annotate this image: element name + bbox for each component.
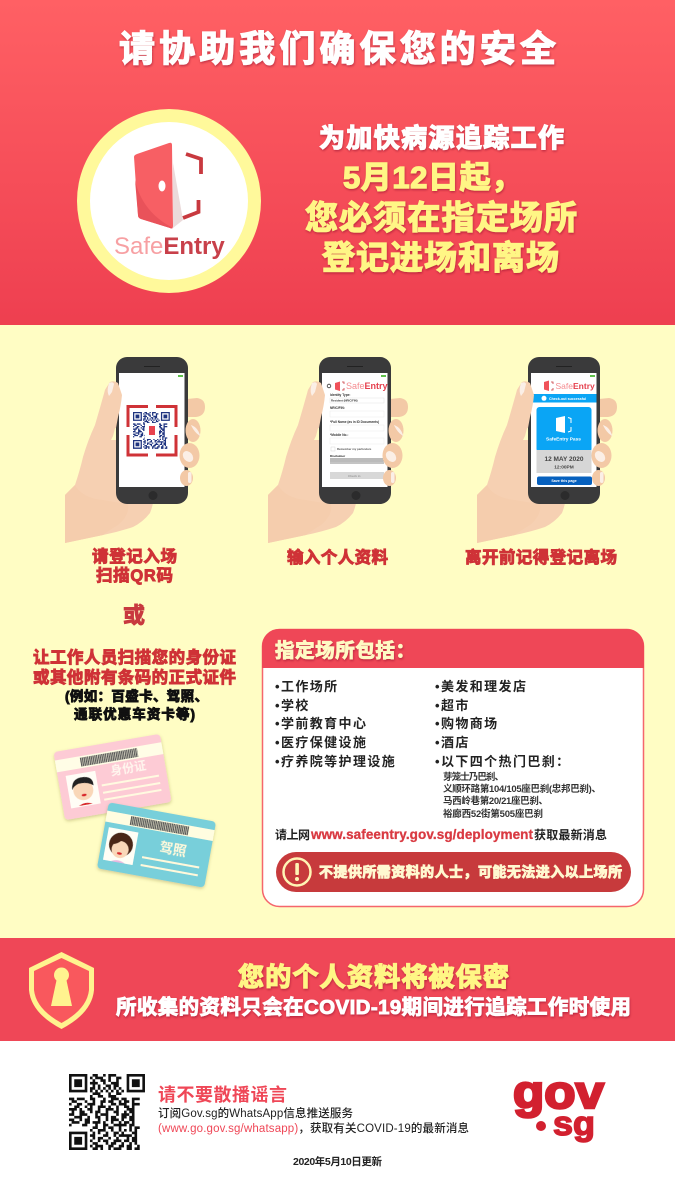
QR scan frame [128, 406, 176, 455]
panel: designated venues [262, 629, 644, 906]
step 2 label: 输入个人资料 [287, 544, 388, 568]
footer text: 请不要散播谣言 [158, 1081, 287, 1107]
form screen [327, 381, 388, 479]
list: left column: •学前教育中心 [275, 716, 367, 731]
step 2: hand with phone form [268, 357, 408, 543]
logo wordmark: SafeEntry [114, 233, 225, 260]
pass screen: SafeEntry [556, 381, 595, 391]
list: left column: •医疗保健设施 [275, 735, 367, 750]
form screen: Check in [348, 474, 361, 478]
logo: gov.sg: sg [553, 1105, 595, 1143]
hawker centre names: 裕廊西52街第505座巴刹 [443, 808, 543, 820]
badge: SafeEntry logo [77, 109, 261, 293]
form screen: Resident (NRIC/FIN) [331, 398, 358, 402]
website line: 获取最新消息 [534, 826, 607, 843]
staff scan text block: (例如：百盛卡、驾照、 [65, 688, 208, 704]
portrait [106, 831, 135, 865]
headline text: 您必须在指定场所 [305, 191, 577, 239]
step 1 label: 扫描QR码 [96, 566, 173, 585]
icon: door [134, 143, 201, 228]
title: 请协助我们确保您的安全 [119, 20, 556, 72]
icon: pink ID card [53, 734, 172, 820]
pass screen: 12:00PM [554, 464, 574, 470]
icon: exclamation [284, 858, 310, 886]
hawker centre names: 义顺环路第104/105座巴刹(忠邦巴刹)、 [443, 783, 601, 795]
form screen: *Mobile No.: [330, 433, 348, 437]
staff scan text block [33, 644, 236, 722]
panel: top red header [0, 0, 675, 325]
panel header [262, 629, 644, 668]
panel heading: 指定场所包括： [275, 634, 415, 663]
QR code [69, 1074, 145, 1150]
list: right column: •酒店 [435, 735, 470, 750]
step 3: hand with SafeEntry pass [477, 357, 617, 543]
update date: 2020年5月10日更新 [293, 1155, 382, 1168]
privacy heading: 您的个人资料将被保密 [238, 957, 509, 994]
staff scan text block: 或其他附有条码的正式证件 [33, 664, 236, 688]
list: left column: •工作场所 [275, 679, 339, 694]
step 3 label: 离开前记得登记离场 [465, 544, 617, 568]
list: right column: •美发和理发店 [435, 679, 527, 694]
staff scan text block: 让工作人员扫描您的身份证 [33, 644, 236, 668]
website line: www.safeentry.gov.sg/deployment [310, 827, 534, 842]
logo: gov.sg: gov [513, 1066, 604, 1118]
step 1 label [92, 543, 177, 585]
privacy note: 所收集的资料只会在COVID-19期间进行追踪工作时使用 [116, 995, 631, 1019]
logo: gov.sg [513, 1066, 604, 1143]
list: right column: •购物商场 [435, 716, 499, 731]
icon: blue driving licence [97, 802, 216, 888]
list: right column [435, 679, 601, 820]
list: right column: •以下四个热门巴刹： [435, 754, 571, 769]
headline text: 登记进场和离场 [322, 231, 559, 279]
pass screen [533, 380, 596, 485]
footer text: 订阅Gov.sg的WhatsApp信息推送服务 [158, 1106, 354, 1120]
list: left column: •疗养院等护理设施 [275, 754, 396, 769]
list: left column: •学校 [275, 698, 310, 713]
form screen: Remember my particulars [337, 447, 372, 451]
headline text [305, 118, 577, 279]
form screen: *Full Name (as in ID Documents) [330, 420, 379, 424]
headline text: 5月12日起， [343, 160, 522, 195]
or: 或 [123, 598, 145, 630]
list: left column [275, 679, 396, 769]
panel: yellow steps section [0, 325, 675, 938]
pass screen: Save this page [551, 479, 577, 483]
website line [275, 826, 607, 843]
icon: blue driving licence: 驾照 [158, 836, 189, 860]
form screen: NRIC/FIN: [330, 406, 345, 410]
warning pill [276, 852, 631, 892]
portrait [70, 775, 97, 807]
hawker centre names: 芽笼士乃巴刹、 [443, 771, 504, 783]
footer text: (www.go.gov.sg/whatsapp)，获取有关COVID-19的最新消息 [158, 1121, 469, 1135]
step 1 label: 请登记入场 [92, 543, 177, 567]
hawker centre names [443, 771, 601, 820]
pass screen: SafeEntry Pass [546, 436, 581, 442]
warning pill: 不提供所需资料的人士，可能无法进入以上场所 [319, 862, 622, 882]
icon: pink ID card: 身份证 [109, 756, 147, 779]
panel: privacy banner [0, 938, 675, 1041]
pass screen: Check-out successful [549, 397, 586, 401]
list: right column: •超市 [435, 698, 470, 713]
step 1: hand with phone scanning QR [65, 357, 205, 543]
staff scan text block: 通联优惠车资卡等) [74, 706, 195, 722]
pass screen: 12 MAY 2020 [544, 456, 584, 463]
form screen: SafeEntry [346, 381, 388, 391]
footer text [158, 1081, 469, 1135]
website line: 请上网 [275, 826, 310, 843]
hawker centre names: 马西岭巷第20/21座巴刹、 [443, 795, 548, 807]
form screen: Disclaimer [330, 454, 346, 458]
icon: shield with keyhole [29, 952, 94, 1029]
form screen: Identity Type: [330, 393, 350, 397]
headline text: 为加快病源追踪工作 [319, 118, 564, 155]
